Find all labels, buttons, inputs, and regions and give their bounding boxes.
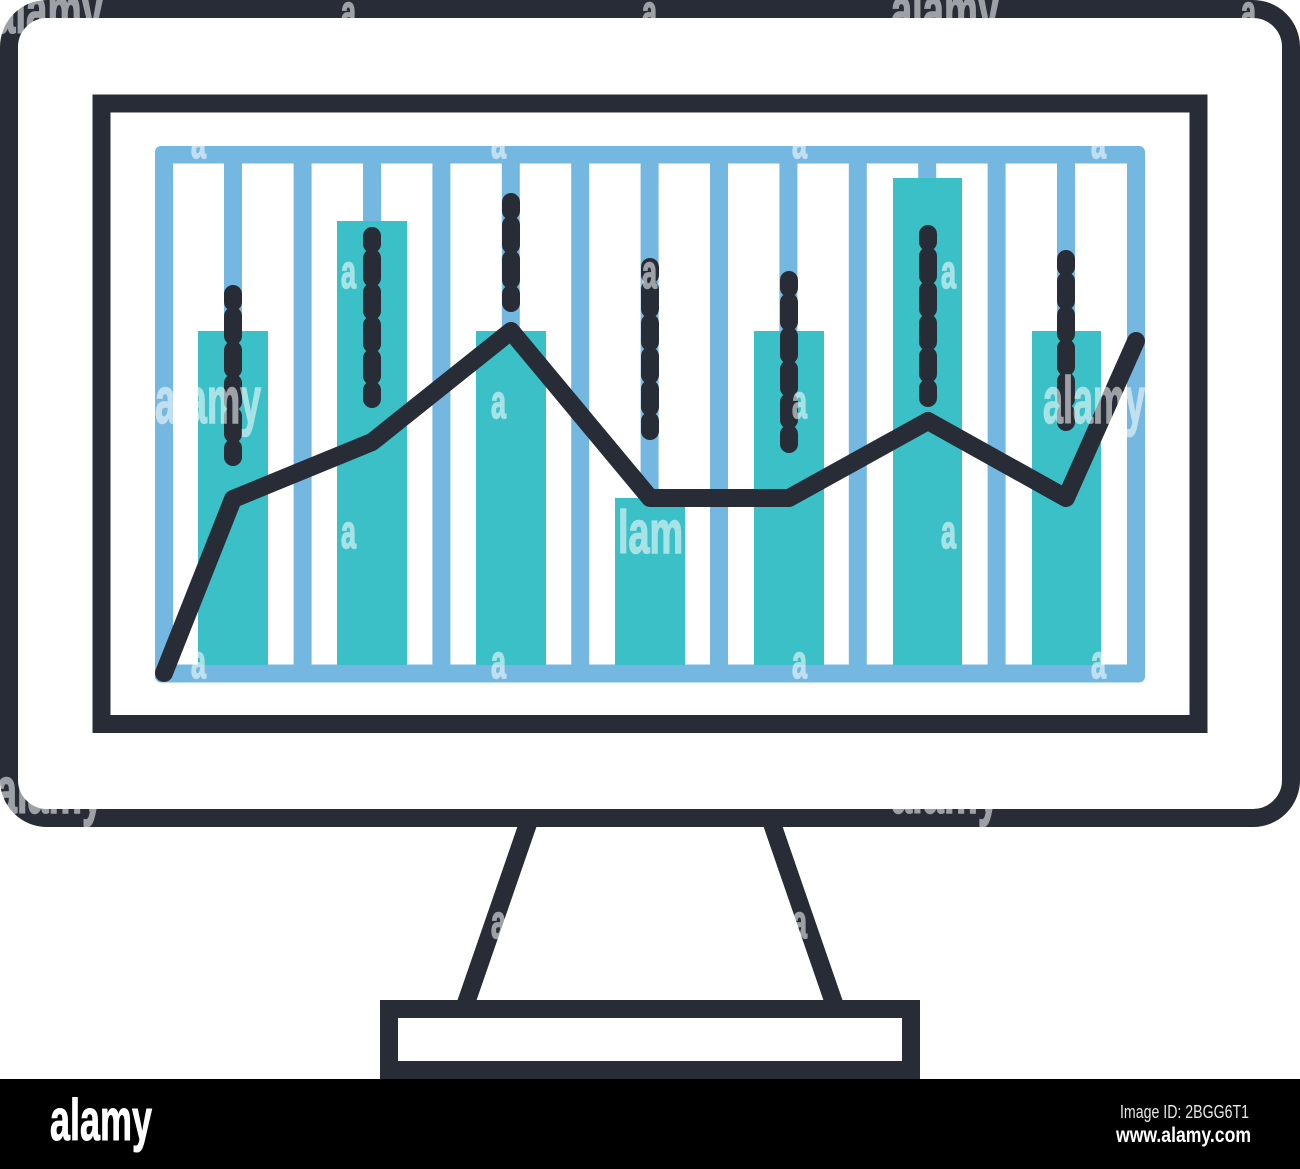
watermarks: alamy: [0, 753, 103, 827]
watermarks: a: [491, 895, 506, 948]
screen border: [102, 104, 1198, 724]
watermarks: a: [191, 115, 206, 168]
watermarks: a: [491, 115, 506, 168]
watermarks: a: [941, 505, 956, 558]
chart grid: [155, 146, 1145, 682]
trend line: [164, 331, 1136, 673]
watermarks: a: [792, 115, 807, 168]
watermarks: a: [642, 245, 657, 298]
monitor base: [389, 1009, 911, 1070]
footer logo: alamy: [50, 1088, 152, 1153]
watermarks: a: [1091, 635, 1106, 688]
monitor stand: [465, 815, 835, 1006]
bar chart: [198, 178, 1101, 665]
watermarks: a: [792, 375, 807, 428]
watermarks: a: [191, 635, 206, 688]
website: www.alamy.com: [1115, 1124, 1251, 1147]
watermarks: alamy: [155, 363, 261, 437]
footer bar: [0, 1079, 1300, 1169]
watermarks: a: [792, 895, 807, 948]
watermarks: a: [341, 505, 356, 558]
image id: Image ID: 2BGG6T1: [1120, 1102, 1249, 1122]
watermarks: alamy: [1043, 363, 1145, 437]
watermarks: a: [941, 245, 956, 298]
watermarks: alamy: [891, 753, 999, 827]
watermarks: lam: [618, 499, 683, 566]
watermarks: a: [491, 375, 506, 428]
watermarks: a: [341, 245, 356, 298]
monitor frame: [9, 9, 1291, 818]
watermarks: a: [792, 635, 807, 688]
watermarks: [0, 0, 1256, 948]
watermarks: a: [491, 635, 506, 688]
dashed value markers: [233, 202, 1066, 457]
watermarks: a: [1091, 115, 1106, 168]
